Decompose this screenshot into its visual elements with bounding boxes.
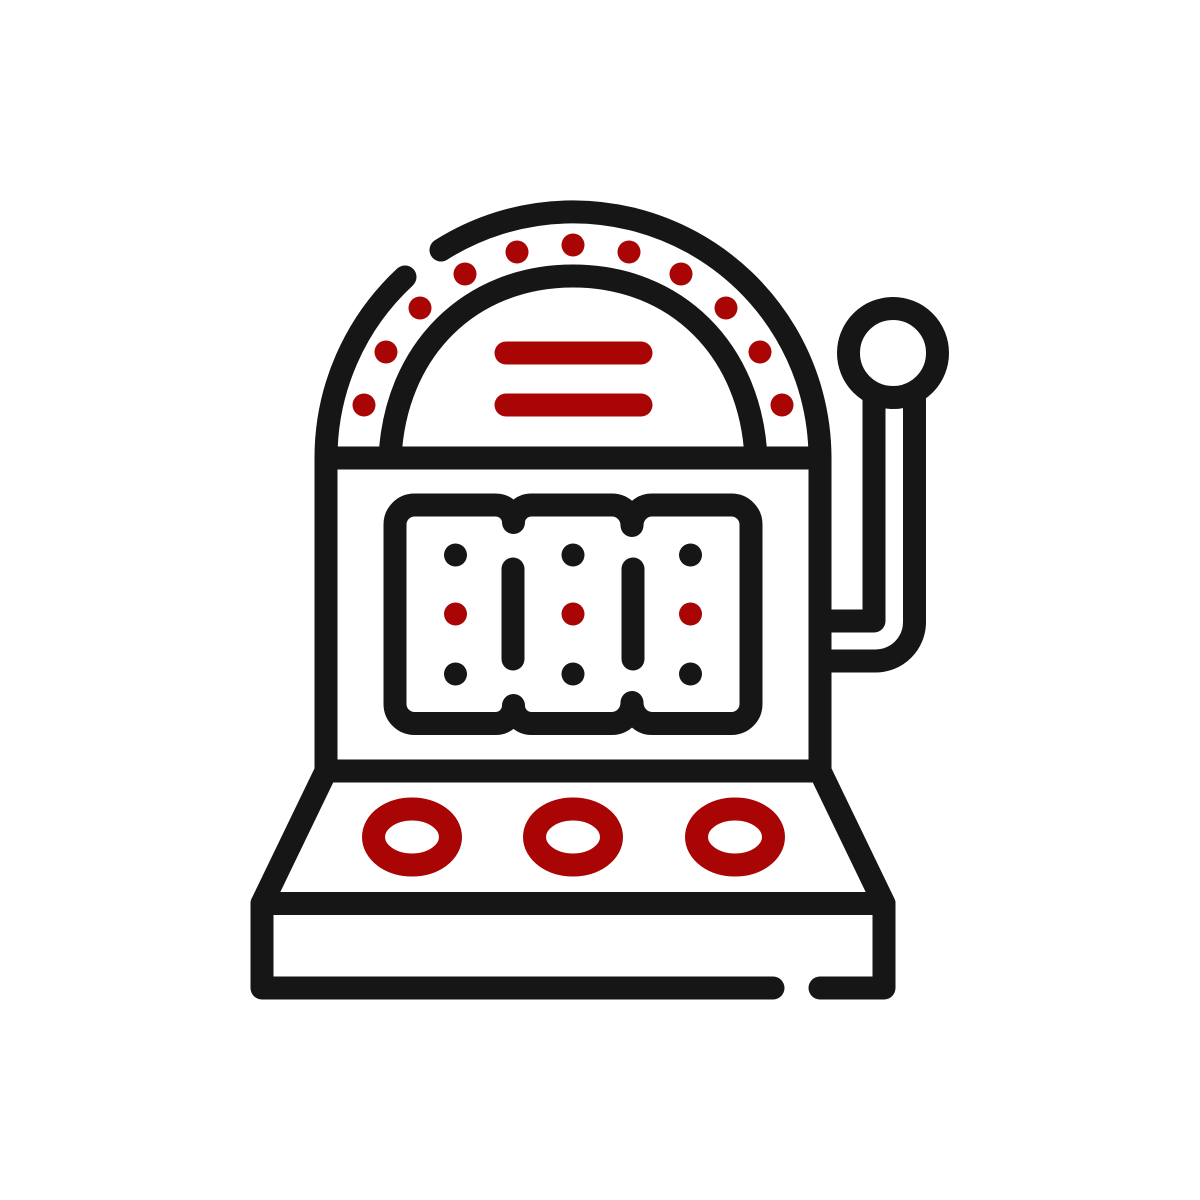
inner dome	[390, 276, 756, 458]
outer dome arch	[326, 212, 820, 458]
red dome lights	[352, 234, 794, 416]
red bars in dome	[506, 353, 641, 405]
reel window	[395, 505, 751, 724]
reel dividers	[513, 569, 633, 659]
machine base	[262, 771, 884, 988]
reel symbols	[444, 544, 702, 686]
cabinet body	[326, 458, 820, 771]
lever knob	[848, 308, 938, 398]
lever arm	[820, 400, 914, 661]
red buttons	[374, 809, 774, 865]
